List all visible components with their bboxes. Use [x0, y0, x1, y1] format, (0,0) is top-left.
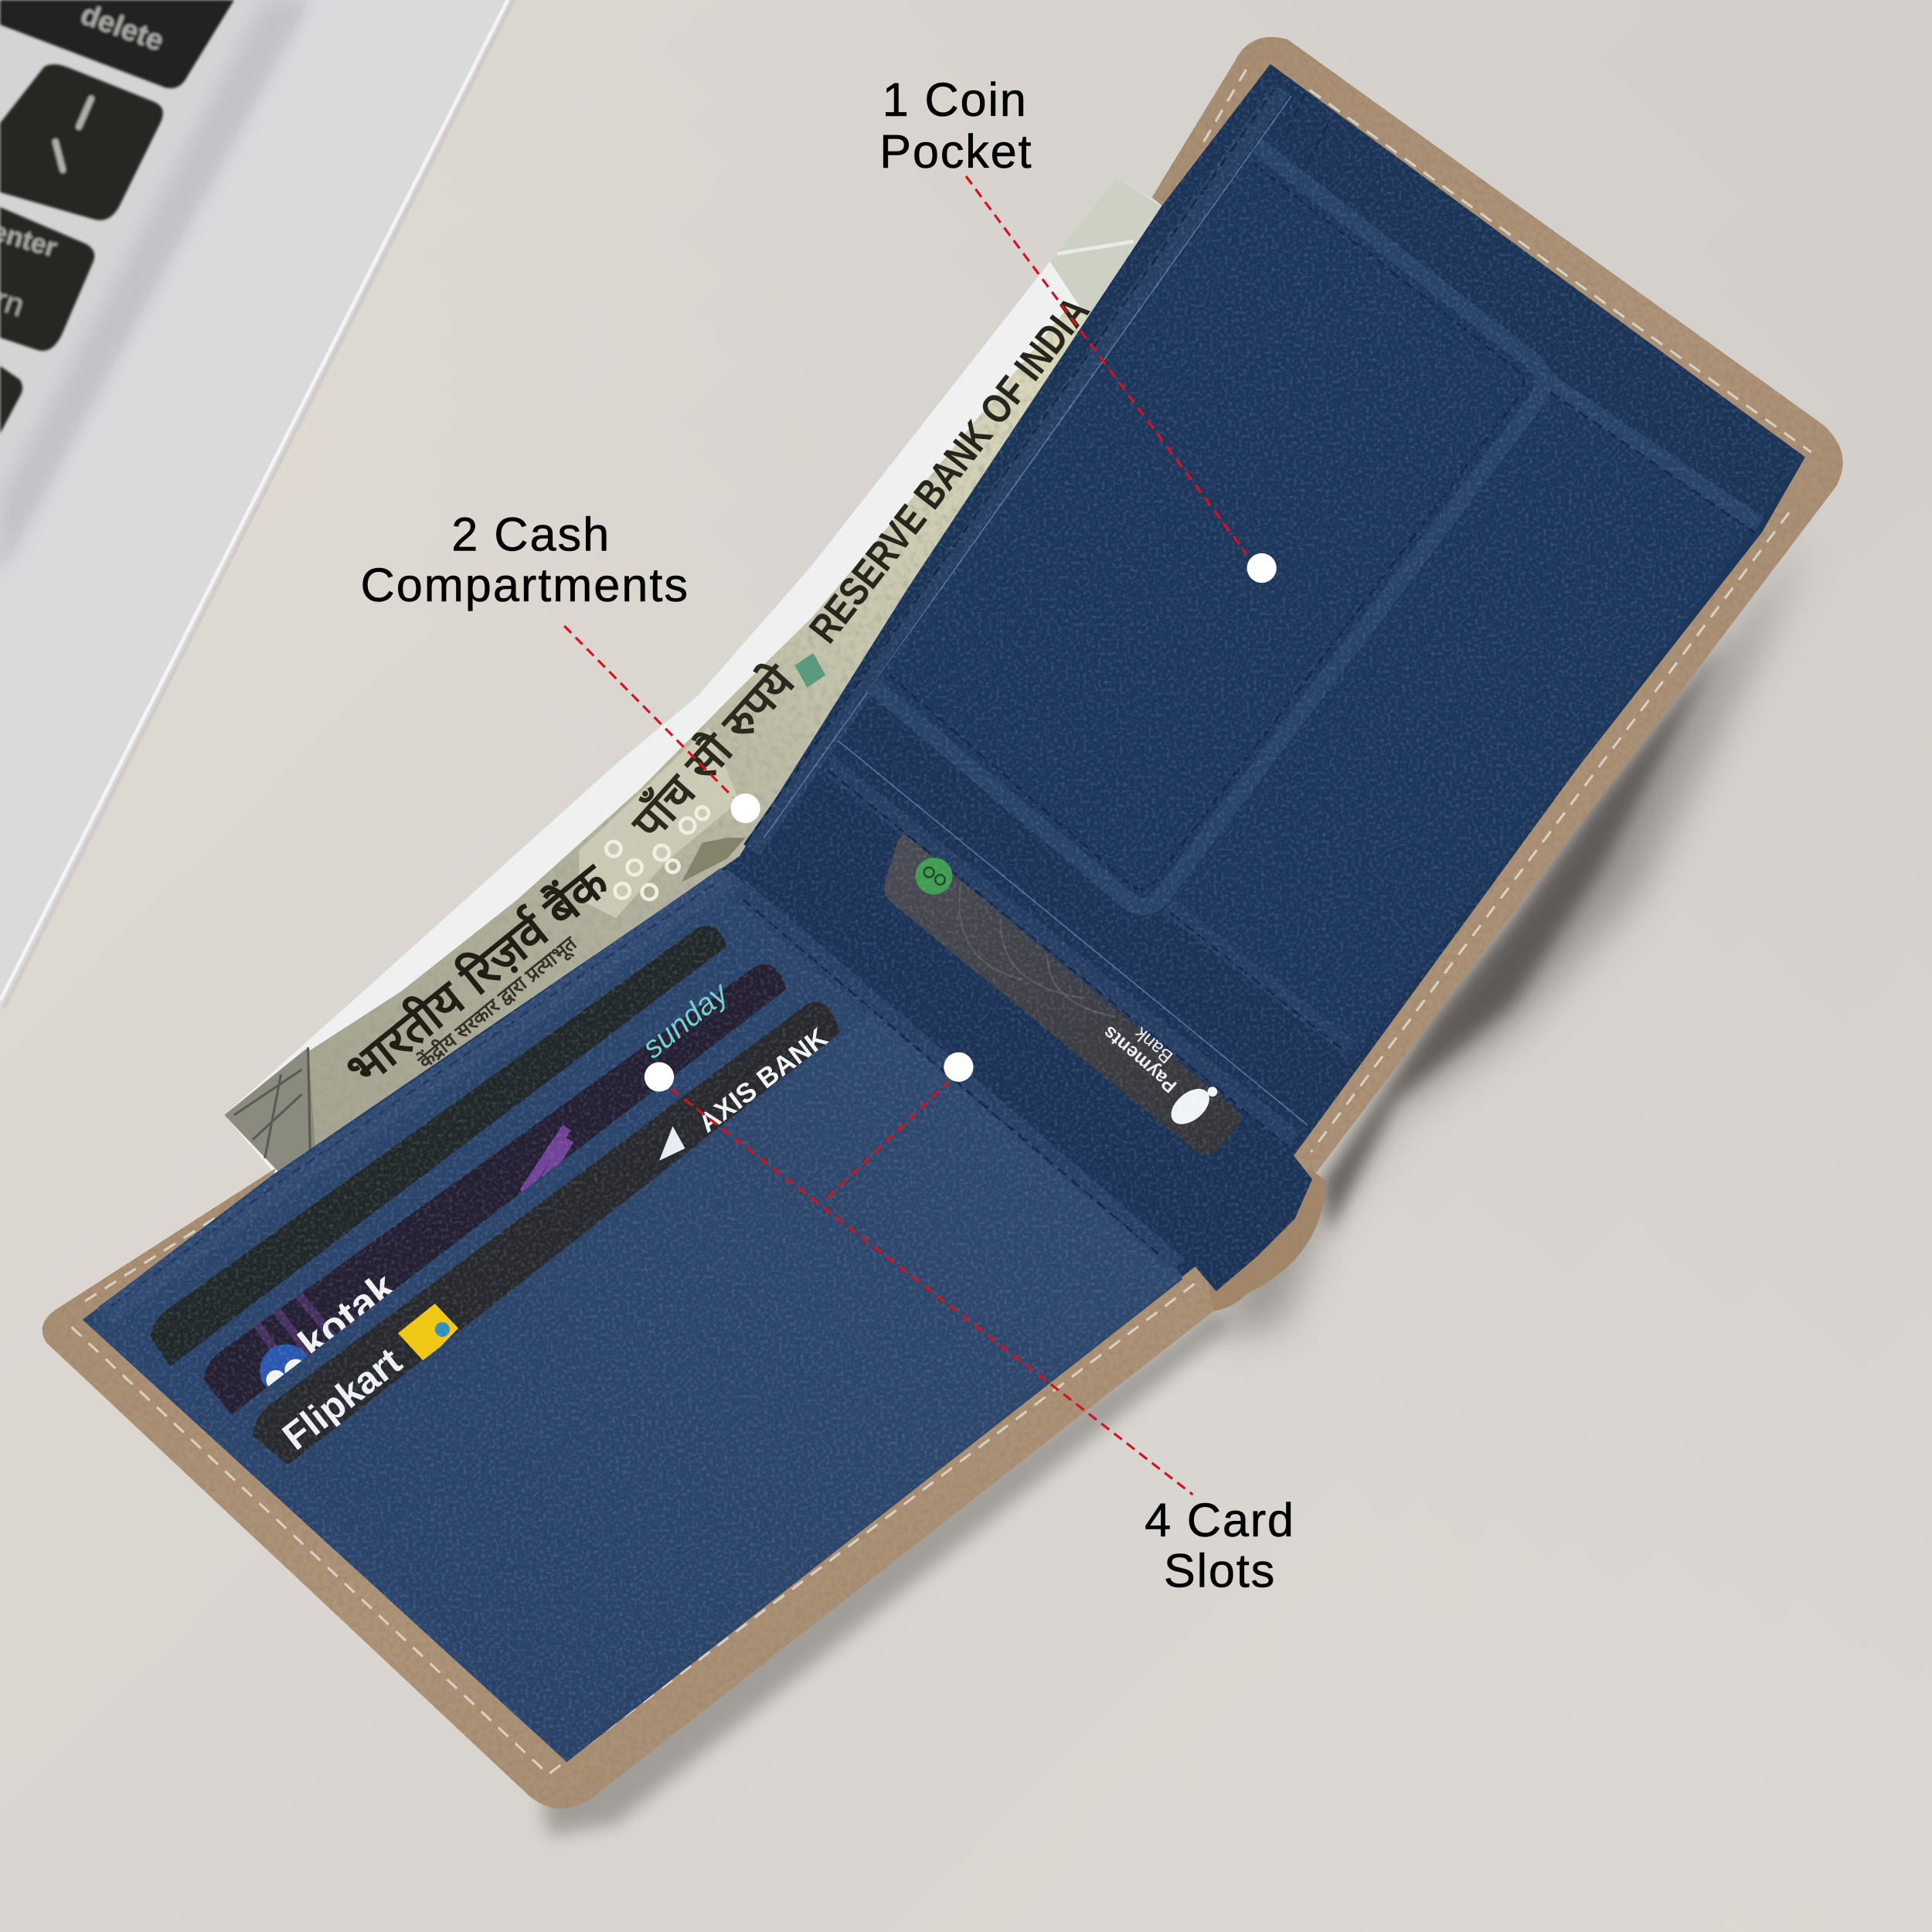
wallet: thin highlight line: [764, 96, 1308, 1125]
callout dot: [730, 794, 760, 823]
callout line: [564, 626, 733, 798]
text: sunday: sunday: [636, 975, 736, 1065]
card: arc pattern: [959, 883, 1115, 1016]
leather texture overlay: [83, 64, 1805, 1762]
card pocket front panel: [286, 1013, 1183, 1762]
note: hindi value: पाँच सौ रुपये: [621, 655, 804, 850]
payments bank card: [884, 835, 1241, 1155]
seam: inner bar: [828, 764, 1294, 1140]
callout: 1 coin pocket: [879, 73, 1277, 583]
note: hindi subtitle: केंद्रीय सरकार द्वारा प्रत्याभूत: [413, 930, 583, 1075]
callout lines: [672, 1082, 1192, 1495]
text: kotak: kotak: [290, 1264, 406, 1368]
card slots: [151, 926, 840, 1465]
note: top watermark corner: [1049, 178, 1162, 318]
note: decorative left corner: [224, 1047, 315, 1171]
wallet shadows: [543, 530, 1811, 1836]
callout text: 2 Cash: [451, 509, 611, 562]
text: axis bank: AXIS BANK: [693, 1022, 834, 1138]
note: engraved texture: [338, 311, 1087, 1077]
flap: stitching: [889, 164, 1523, 889]
note: reserve bank of india: RESERVE BANK OF INDIA: [801, 288, 1098, 651]
callout dot: upper slots: [645, 1062, 674, 1092]
note: printed area: [296, 305, 1109, 1183]
logo: paytm mark: [1165, 1082, 1217, 1131]
callout dot: [1247, 553, 1277, 583]
key: slash: [0, 64, 163, 220]
card: axis and flipkart: [253, 1002, 840, 1465]
callout text: 4 Card: [1145, 1494, 1295, 1547]
callout: 2 cash compartments: [360, 509, 760, 823]
card: plain black: [151, 926, 727, 1366]
callout dot: front pocket: [944, 1053, 974, 1082]
seam: gusset bar: [740, 889, 1177, 1267]
wallet: left panel lining: [83, 869, 1183, 1762]
seam: pocket lower bar: [1167, 906, 1349, 1047]
seam: pocket top bar: [1542, 377, 1760, 525]
key: delete: [0, 0, 234, 88]
callout line: [966, 176, 1247, 554]
note: hindi title: भारतीय रिज़र्व बैंक: [335, 853, 620, 1097]
note: rosette pattern: [606, 807, 709, 900]
wallet: right pocket area: [1167, 382, 1762, 1060]
wallet: blue interior: [83, 64, 1805, 1762]
text: payments bank: Payments: [1099, 1022, 1181, 1097]
seam: spine bar: [752, 89, 1281, 850]
coin pocket flap: [872, 145, 1547, 912]
seam: left panel top bar: [105, 877, 727, 1316]
wallet: tan outer left panel: [43, 1168, 1218, 1809]
note: light patch: [579, 727, 740, 918]
flap: raised edge: [872, 145, 1543, 906]
note: green mark: [794, 653, 825, 688]
callout: 4 card slots: [645, 1053, 1295, 1598]
wallet: stitching: [71, 64, 1811, 1774]
text: payments bank: Bank: [1131, 1022, 1177, 1067]
text: flipkart: Flipkart: [275, 1340, 410, 1458]
logo: flipkart bag: [398, 1304, 458, 1362]
logo: axis: [659, 1126, 685, 1161]
key: enter: [0, 207, 94, 351]
key: partial: [0, 366, 22, 434]
logo: green mark: [916, 858, 952, 895]
wallet: tan outer right panel: [1152, 37, 1843, 1176]
wallet: raised seams: [105, 89, 1760, 1316]
callout text: 1 Coin: [883, 73, 1028, 127]
wallet: top strip: [1257, 99, 1805, 532]
laptop corner with keys: [0, 0, 514, 1008]
banknote: [224, 178, 1162, 1173]
logo: kotak circle: [260, 1344, 311, 1396]
card: kotak purple: [203, 964, 786, 1414]
wallet: tan spine curve: [1207, 1168, 1326, 1311]
callout text: Pocket: [879, 125, 1032, 179]
callout text: Slots: [1164, 1545, 1276, 1598]
callout text: Compartments: [360, 559, 689, 612]
wallet: stitch lines: [111, 87, 1754, 1306]
note: dark patch near spine: [682, 838, 746, 883]
